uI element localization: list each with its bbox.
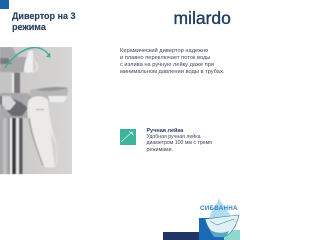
lever handle <box>27 96 57 168</box>
description text: с излива на ручную лейку даже при <box>120 62 214 68</box>
icon: teal square with shower head <box>120 129 136 145</box>
title: режима <box>12 22 46 32</box>
feature text <box>146 134 212 152</box>
description text: и плавно переключает поток воды <box>120 55 210 61</box>
brand name: СИБВАННА <box>200 205 238 212</box>
description text: минимальном давлении воды в трубах. <box>120 69 224 75</box>
mixer body <box>0 93 34 118</box>
brand logo: Sibvanna <box>163 198 240 240</box>
title: Дивертор на 3 <box>12 11 75 21</box>
product photo: chrome faucet with diverter <box>0 47 72 175</box>
arrow: diverter rotation <box>5 48 50 68</box>
feature text: режимами. <box>146 146 173 152</box>
description text <box>120 48 224 75</box>
description text: Керамический дивертор надежно <box>120 48 208 54</box>
feature heading: Ручная лейка <box>146 128 183 134</box>
diverter knob <box>24 50 38 73</box>
feature text: диаметром 100 мм с тремя <box>146 140 212 146</box>
title <box>12 11 76 32</box>
vertical pipes <box>12 73 14 93</box>
corner accent: blue block <box>0 0 9 9</box>
spout <box>30 87 68 102</box>
feature text: Удобная ручная лейка <box>146 134 200 140</box>
faucet body upper <box>0 47 28 93</box>
feature: hand shower <box>146 128 212 152</box>
brand logo: milardo: milardo <box>174 8 231 28</box>
